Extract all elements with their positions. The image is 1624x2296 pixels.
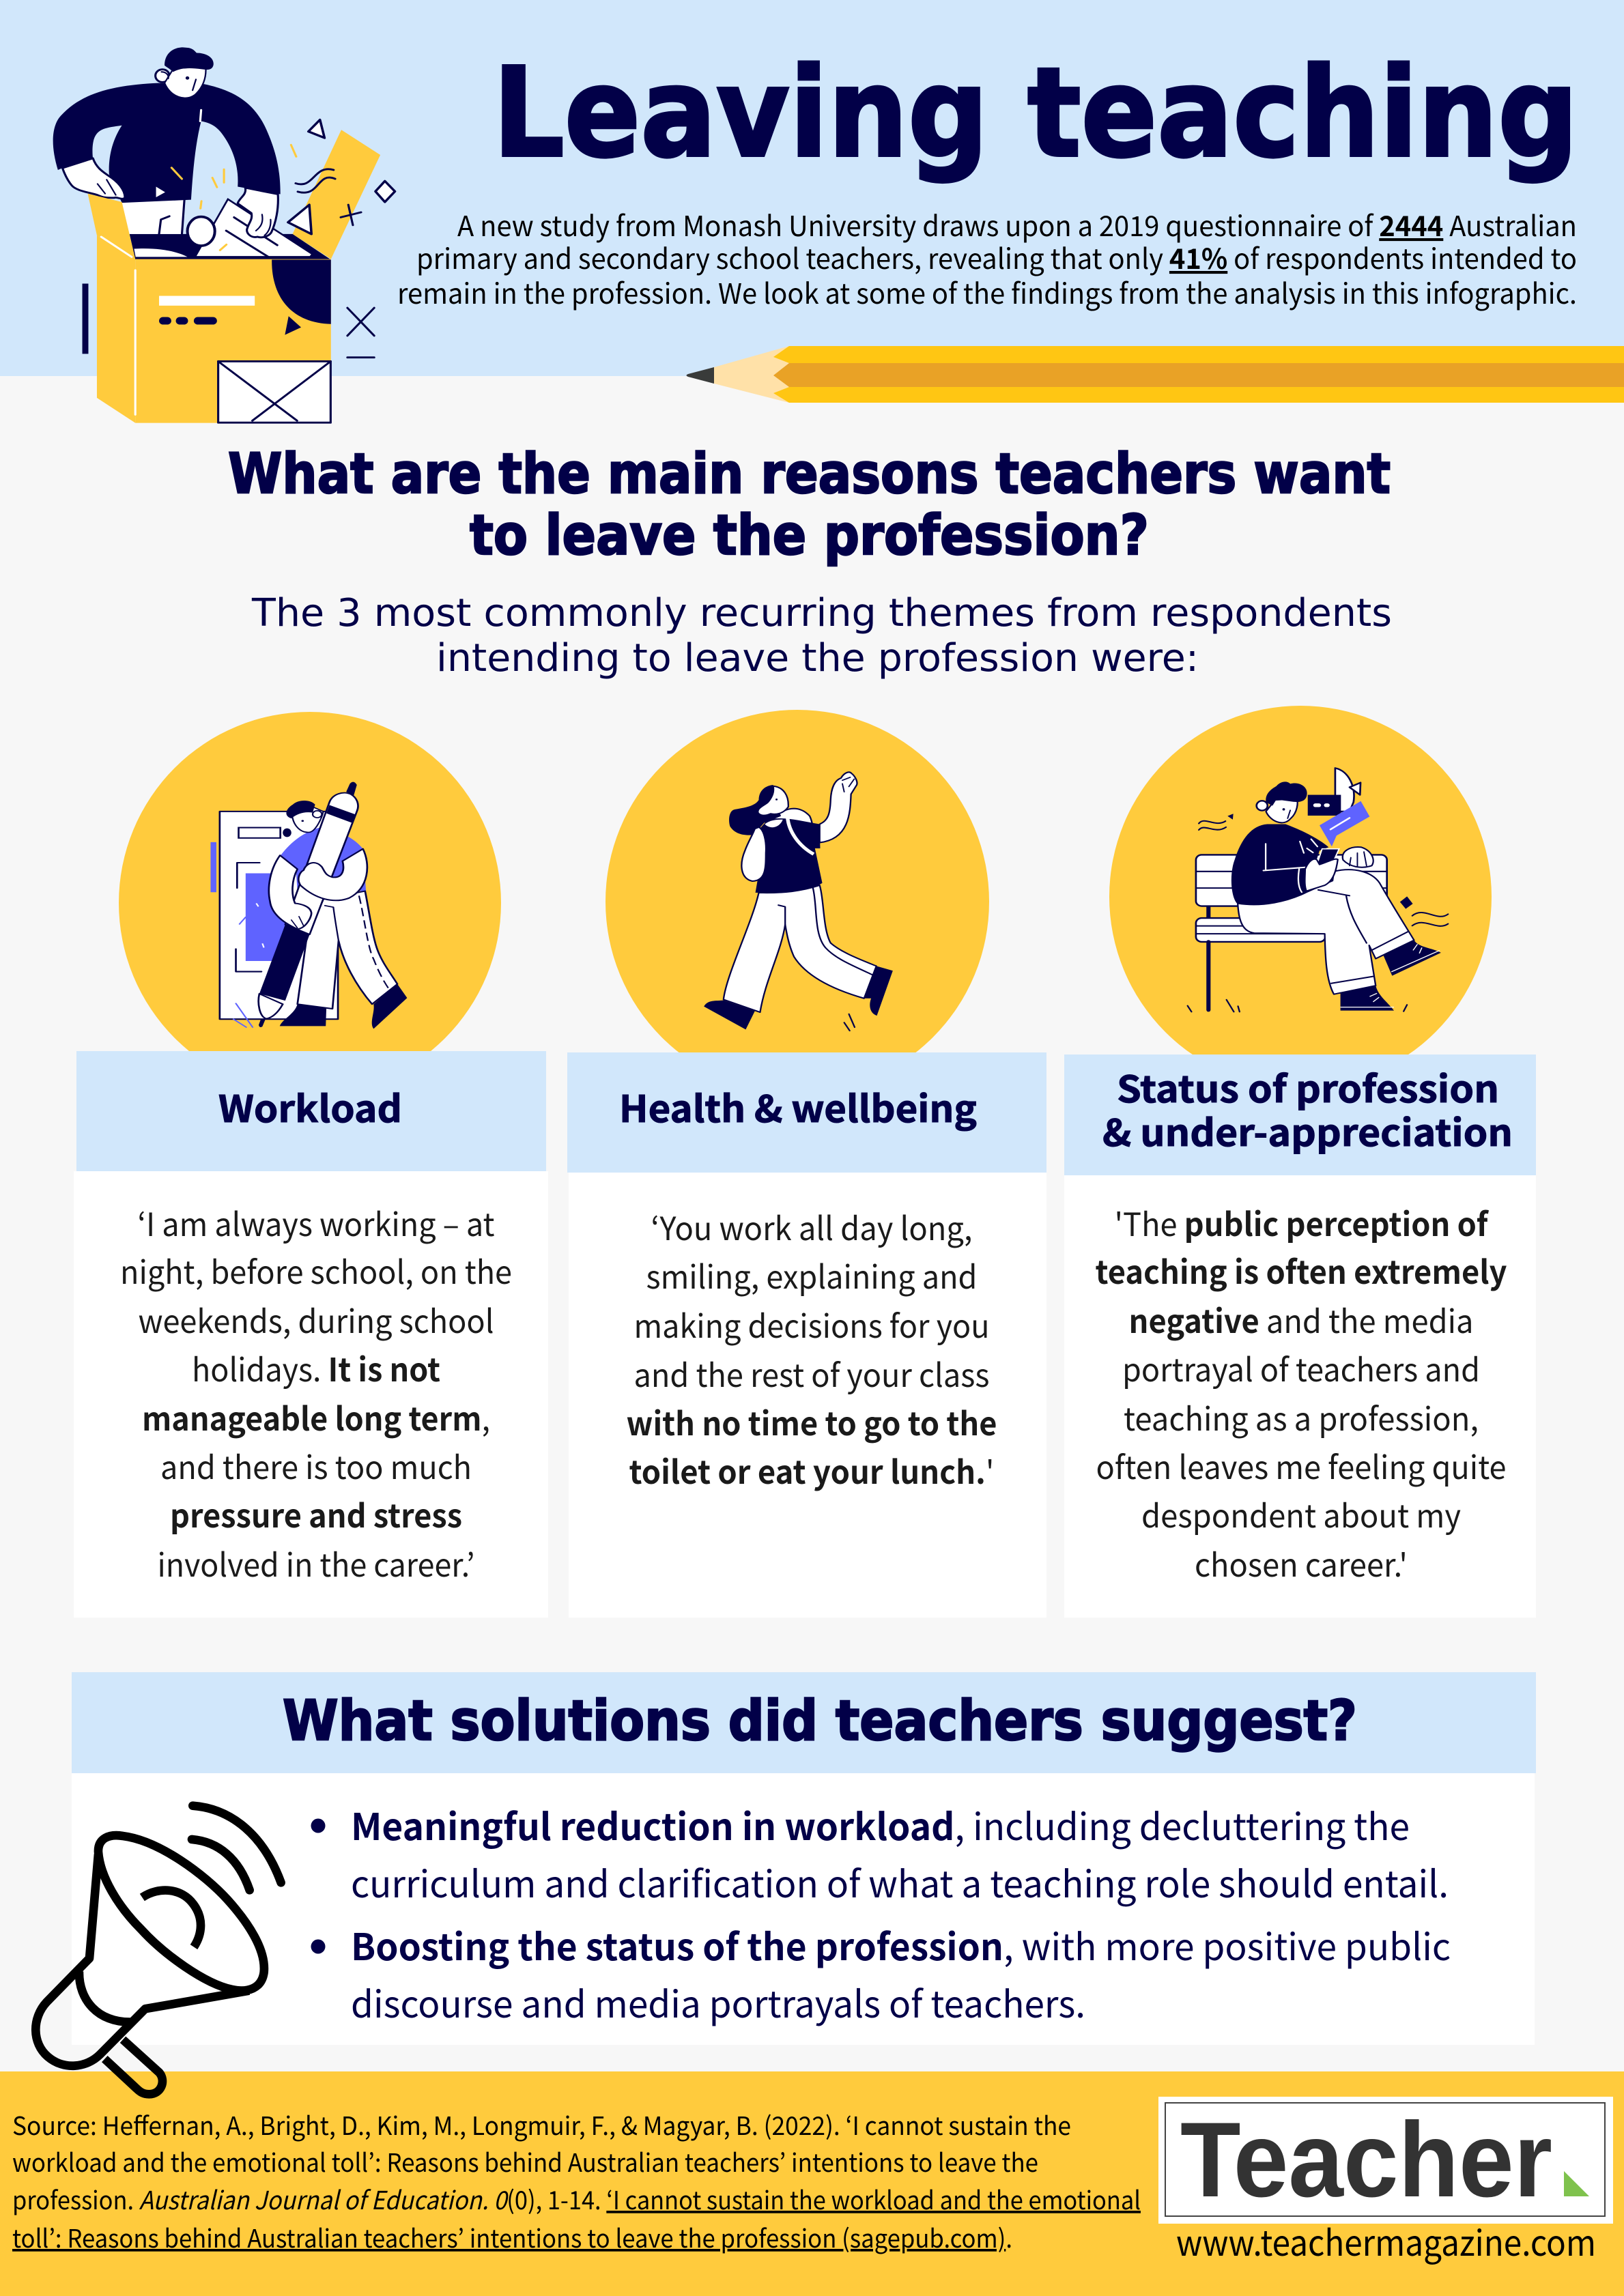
quote: workload: weekends, during school (138, 1295, 494, 1343)
source text: toll’: Reasons behind Australian teachers’ intentions to leave the profession (sagepub.com). (12, 2218, 1012, 2255)
illustration: woman walking away (704, 772, 893, 1031)
intro text: remain in the profession. We look at some of the findings from the analysis in this infographic. (397, 271, 1577, 312)
logo: Teacher: Teacher (1180, 2101, 1552, 2220)
illustration: man hugging a giant pencil (210, 782, 407, 1029)
yellow circle: wellbeing (606, 710, 989, 1093)
source text (12, 2106, 1141, 2255)
solutions bullets (311, 1797, 1451, 2028)
quote: health: smiling, explaining and (646, 1251, 978, 1298)
quote: status: 'The public perception of (1114, 1199, 1490, 1246)
panel heading: status (1102, 1059, 1513, 1157)
footer band (0, 2071, 1624, 2296)
solutions bullets: Boosting the status of the profession, with more positive public (351, 1917, 1451, 1971)
panel: health and wellbeing (567, 1052, 1046, 1618)
quote: workload: involved in the career.’ (157, 1539, 475, 1586)
quote: health: toilet or eat your lunch.' (629, 1446, 994, 1493)
intro text: A new study from Monash University draws upon a 2019 questionnaire of 2444 Australian (457, 203, 1577, 244)
quote: health: and the rest of your class (633, 1349, 990, 1396)
subheading: intending to leave the profession were: (436, 636, 1199, 680)
quote: status: despondent about my (1141, 1490, 1461, 1537)
quote: status: teaching is often extremely (1095, 1246, 1507, 1293)
quote: status: negative and the media (1129, 1295, 1473, 1343)
solutions bullets: Meaningful reduction in workload, including decluttering the (351, 1797, 1410, 1851)
solutions bullets: curriculum and clarification of what a teaching role should entail. (351, 1854, 1449, 1908)
panel heading: health: Health & wellbeing (619, 1079, 977, 1133)
yellow circle: status (1109, 706, 1492, 1088)
quote: workload: ‘I am always working – at (138, 1199, 495, 1246)
quote: workload: pressure and stress (170, 1490, 462, 1537)
quote: health: with no time to go to the (627, 1398, 997, 1445)
illustration: person unpacking a box (53, 47, 395, 423)
header band (0, 0, 1624, 376)
quote: workload: holidays. It is not (192, 1344, 440, 1391)
solutions heading: What solutions did teachers suggest? (283, 1689, 1357, 1753)
panel heading: status: Status of profession (1117, 1059, 1499, 1113)
quote: health (627, 1203, 997, 1493)
illustration: man on a bench with a phone (1188, 768, 1448, 1011)
source text: workload and the emotional toll’: Reasons behind Australian teachers’ intentions to leave the (12, 2142, 1038, 2179)
panel heading: workload: Workload (218, 1079, 402, 1133)
quote: status (1095, 1199, 1507, 1586)
heading: main reasons (228, 442, 1391, 568)
quote: workload (120, 1199, 512, 1586)
quote: health: making decisions for you (633, 1300, 990, 1347)
subheading (251, 591, 1392, 680)
yellow circle: workload (119, 712, 501, 1094)
icon: megaphone (35, 1806, 281, 2094)
quote: status: chosen career.' (1195, 1539, 1408, 1586)
website url: www.teachermagazine.com (1176, 2215, 1596, 2266)
heading: main reasons: to leave the profession? (470, 504, 1149, 568)
quote: health: ‘You work all day long, (651, 1203, 972, 1250)
intro text (397, 203, 1577, 312)
quote: workload: night, before school, on the (120, 1246, 512, 1293)
quote: status: portrayal of teachers and (1122, 1344, 1480, 1391)
quote: workload: and there is too much (160, 1441, 472, 1489)
quote: status: often leaves me feeling quite (1096, 1441, 1506, 1489)
solutions bullets: discourse and media portrayals of teachers. (351, 1975, 1085, 2028)
subheading: The 3 most commonly recurring themes from respondents (251, 591, 1392, 635)
panel heading: status: & under-appreciation (1102, 1103, 1513, 1157)
quote: status: teaching as a profession, (1124, 1393, 1479, 1440)
intro text: primary and secondary school teachers, revealing that only 41% of respondents intended to (416, 236, 1577, 277)
quote: workload: manageable long term, (142, 1393, 490, 1440)
source text: profession. Australian Journal of Education. 0(0), 1-14. ‘I cannot sustain the workload and the emotional (12, 2180, 1141, 2217)
source text: Source: Heffernan, A., Bright, D., Kim, M., Longmuir, F., & Magyar, B. (2022). ‘I cannot sustain the (12, 2106, 1071, 2142)
heading: main reasons: What are the main reasons teachers want (228, 442, 1391, 506)
panel: status of profession (1064, 1054, 1536, 1618)
panel: workload (74, 1051, 548, 1618)
panel: solutions (72, 1672, 1536, 2045)
icon: pencil (686, 346, 1624, 403)
